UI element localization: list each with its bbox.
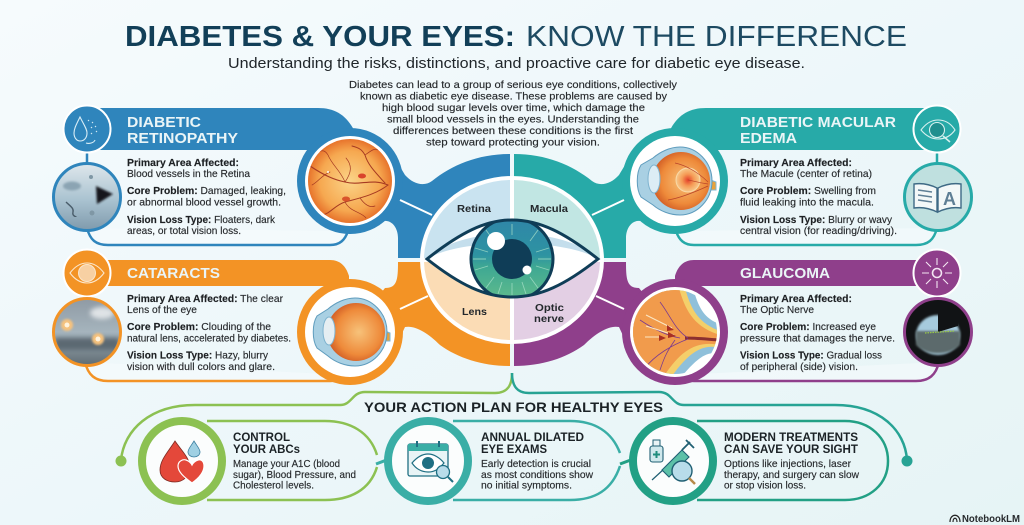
text block: edema details xyxy=(740,157,897,237)
panel outline xyxy=(676,228,937,245)
panel outline xyxy=(676,362,939,381)
connector xyxy=(936,150,938,170)
card text: sugar), Blood Pressure, and xyxy=(233,469,356,481)
eye xyxy=(427,218,598,300)
intro text: step toward protecting your vision. xyxy=(426,137,600,149)
text block: cataracts details: Primary Area Affected: The clear xyxy=(127,293,283,305)
text block: retinopathy details: Core Problem: Damaged, leaking, xyxy=(127,185,286,197)
connector xyxy=(86,296,88,300)
connector xyxy=(937,296,939,300)
text block: cataracts details: Vision Loss Type: Hazy, blurry xyxy=(127,350,269,362)
white ellipse xyxy=(420,176,604,344)
text block: retinopathy details: or abnormal blood vessel growth. xyxy=(127,196,281,208)
text block: edema details: central vision (for reading/driving). xyxy=(740,225,897,237)
card text xyxy=(481,458,593,492)
intro text: Diabetes can lead to a group of serious eye conditions, collectively xyxy=(349,79,678,91)
text block: edema details: Vision Loss Type: Blurry or wavy xyxy=(740,214,893,226)
text block: cataracts details: natural lens, accelerated by diabetes. xyxy=(127,332,291,344)
label: macula: Macula xyxy=(530,203,568,215)
spokes xyxy=(400,200,624,309)
text block: edema details: fluid leaking into the macula. xyxy=(740,196,874,208)
subtitle: Understanding the risks, distinctions, and proactive care for diabetic eye disease. xyxy=(228,55,805,72)
teal banner and arc xyxy=(514,108,934,258)
bracket: teal connector xyxy=(512,373,912,466)
card heading: ANNUAL DILATED xyxy=(481,430,584,444)
panel: diabetic macular edema xyxy=(514,106,972,258)
text block: retinopathy details: Vision Loss Type: Floaters, dark xyxy=(127,214,276,226)
card text: Options like injections, laser xyxy=(724,458,851,470)
action card: control your ABCs xyxy=(142,421,377,501)
title xyxy=(125,21,907,53)
vision circle: tunnel vision xyxy=(904,298,972,366)
label: retina: Retina xyxy=(457,203,491,215)
vision circle: open book xyxy=(904,164,972,230)
text block: cataracts details: Lens of the eye xyxy=(127,304,197,316)
eye cross-section illustration xyxy=(305,287,395,377)
section heading: DIABETIC xyxy=(127,114,201,131)
purple banner and arc xyxy=(514,260,934,370)
text block: glaucoma details: of peripheral (side) vision. xyxy=(740,361,858,373)
panel: diabetic retinopathy xyxy=(54,106,510,258)
card heading xyxy=(481,430,584,456)
text block: glaucoma details: Primary Area Affected: xyxy=(740,293,852,305)
panel outline xyxy=(87,228,348,245)
card heading: EYE EXAMS xyxy=(481,442,547,456)
text block: glaucoma details: The Optic Nerve xyxy=(740,304,814,316)
action card: modern treatments xyxy=(620,421,888,501)
tail xyxy=(376,458,392,464)
bracket: green connector xyxy=(116,373,512,466)
text block: glaucoma details xyxy=(740,293,895,373)
text block: glaucoma details: Vision Loss Type: Gradual loss xyxy=(740,350,882,362)
text block: edema details: The Macule (center of retina) xyxy=(740,168,872,180)
text block: retinopathy details: Blood vessels in the Retina xyxy=(127,168,250,180)
title: DIABETES & YOUR EYES: xyxy=(125,21,515,53)
optic nerve illustration xyxy=(630,285,720,377)
quadrant: retina xyxy=(424,180,510,258)
text block: glaucoma details: Core Problem: Increased eye xyxy=(740,321,876,333)
section heading line 2: RETINOPATHY xyxy=(127,130,238,147)
text block: retinopathy details xyxy=(127,157,286,237)
text block: glaucoma details: pressure that damages the nerve. xyxy=(740,332,895,344)
text block: retinopathy details: Primary Area Affected: xyxy=(127,157,239,169)
image ring xyxy=(297,128,403,234)
card text: Cholesterol levels. xyxy=(233,480,314,492)
label: optic nerve: Optic xyxy=(535,302,564,314)
section heading line 2: EDEMA xyxy=(740,130,797,147)
icon: calendar with eye xyxy=(388,421,468,501)
fundus illustration xyxy=(305,136,395,226)
vision circle: hazy glare xyxy=(54,298,120,366)
card text xyxy=(233,458,356,492)
card heading: CAN SAVE YOUR SIGHT xyxy=(724,442,859,456)
card text: or stop vision loss. xyxy=(724,480,806,492)
card heading: YOUR ABCs xyxy=(233,442,300,456)
card heading: CONTROL xyxy=(233,430,290,444)
text block: edema details: Primary Area Affected: xyxy=(740,157,852,169)
card heading xyxy=(724,430,859,456)
quadrant: optic nerve xyxy=(514,262,600,340)
panel: glaucoma xyxy=(514,250,972,385)
card heading xyxy=(233,430,300,456)
intro text: small blood vessels in the eyes. Understanding the xyxy=(387,114,639,126)
intro text: high blood sugar levels over time, which damage the xyxy=(382,102,645,114)
icon: sun rays xyxy=(914,250,960,296)
section heading: CATARACTS xyxy=(127,265,220,282)
image ring xyxy=(297,279,403,385)
pill outline xyxy=(697,421,888,500)
icon: eye lens xyxy=(64,250,110,296)
text block: edema details: Core Problem: Swelling from xyxy=(740,185,876,197)
card text: Manage your A1C (blood xyxy=(233,458,340,470)
blue banner and arc xyxy=(90,108,510,258)
card text: no initial symptoms. xyxy=(481,480,572,492)
icon: blood drop and heart xyxy=(142,421,222,501)
vision circle: open book: A xyxy=(943,189,956,209)
card text: Early detection is crucial xyxy=(481,458,591,470)
icon: water drop xyxy=(64,106,110,152)
macula illustration xyxy=(630,136,720,226)
label: lens: Lens xyxy=(462,306,487,318)
orange banner and arc xyxy=(90,260,510,370)
icon: eye with magnifier xyxy=(914,106,960,152)
NotebookLM logo: NotebookLM xyxy=(962,513,1020,525)
panel outline xyxy=(85,362,348,381)
connector xyxy=(86,150,88,170)
title: KNOW THE DIFFERENCE xyxy=(526,21,907,53)
quadrant: lens xyxy=(424,262,510,340)
panel: cataracts xyxy=(54,250,510,385)
section heading: DIABETIC MACULAR xyxy=(740,114,896,131)
icon: medicine and syringe xyxy=(633,421,713,501)
image ring xyxy=(622,128,728,234)
image ring xyxy=(622,279,728,385)
label: optic nerve xyxy=(534,302,564,325)
card text xyxy=(724,458,859,492)
card text: as most conditions show xyxy=(481,469,593,481)
tail xyxy=(620,458,636,464)
intro text: known as diabetic eye disease. These problems are caused by xyxy=(360,91,668,103)
action plan heading: YOUR ACTION PLAN FOR HEALTHY EYES xyxy=(364,399,663,415)
quadrant: macula xyxy=(514,180,600,258)
card text: therapy, and surgery can slow xyxy=(724,469,859,481)
intro text: differences between these conditions is the first xyxy=(393,125,633,137)
text block: retinopathy details: areas, or total vision loss. xyxy=(127,225,241,237)
intro text xyxy=(349,79,678,149)
action card: annual dilated eye exams xyxy=(376,421,620,501)
card heading: MODERN TREATMENTS xyxy=(724,430,858,444)
text block: cataracts details: Core Problem: Clouding of the xyxy=(127,321,271,333)
pill outline xyxy=(453,421,620,500)
text block: cataracts details: vision with dull colors and glare. xyxy=(127,361,275,373)
text block: cataracts details xyxy=(127,293,291,373)
pill outline xyxy=(207,421,377,500)
label: optic nerve: nerve xyxy=(534,313,564,325)
central eye diagram xyxy=(400,176,624,344)
vision circle: floaters xyxy=(54,164,120,230)
section heading: GLAUCOMA xyxy=(740,265,830,282)
